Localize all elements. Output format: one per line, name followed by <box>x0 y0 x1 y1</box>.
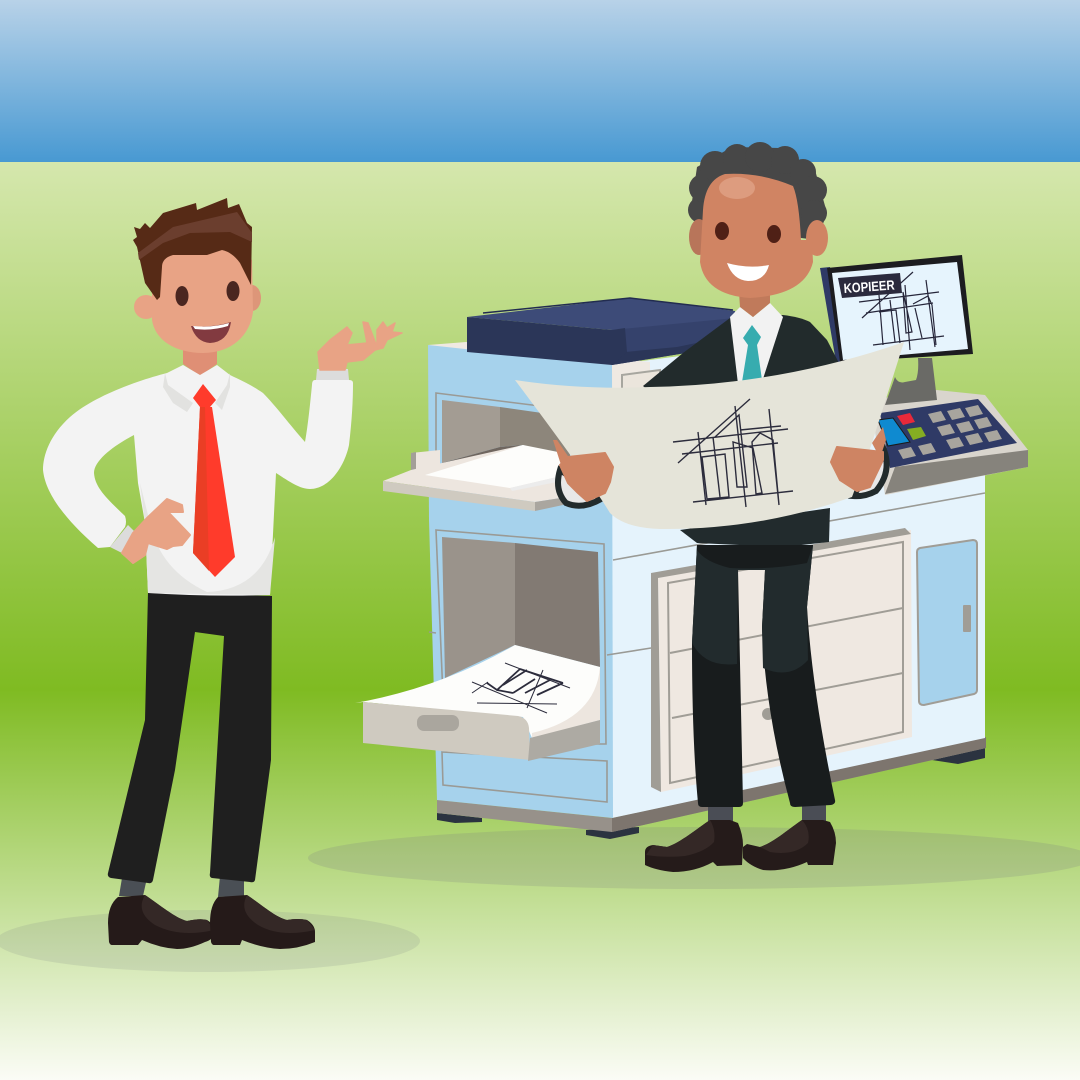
left hand <box>560 453 613 501</box>
socks <box>119 876 244 897</box>
trouser upper shading <box>692 545 813 672</box>
monitor sketch <box>859 272 944 350</box>
blueprint sheet <box>515 342 904 529</box>
eyes <box>176 286 188 306</box>
panel lines <box>429 493 985 655</box>
shoes <box>108 895 315 949</box>
right man <box>515 142 904 872</box>
ears <box>134 295 158 319</box>
control panel <box>870 390 1028 495</box>
trousers <box>108 592 272 883</box>
smile <box>727 263 769 281</box>
paper slot <box>622 370 660 395</box>
copier front blue body <box>428 345 613 818</box>
monitor <box>820 255 973 405</box>
forehead highlight <box>719 177 755 199</box>
jacket <box>643 315 840 392</box>
cuffs <box>558 450 887 506</box>
copier right body <box>612 340 985 818</box>
mouth <box>191 322 231 343</box>
right hand <box>831 447 883 491</box>
blueprint sketch on paper <box>472 663 570 713</box>
neck <box>739 292 770 317</box>
wrists <box>553 427 886 468</box>
collar <box>163 373 230 412</box>
head <box>700 174 813 298</box>
shoes <box>645 820 836 872</box>
jacket bottom <box>680 508 830 547</box>
socks <box>708 806 733 823</box>
tie <box>193 384 235 577</box>
ears <box>689 219 709 255</box>
left cuff <box>110 525 136 553</box>
hand on hip <box>122 499 190 563</box>
monitor label: KOPIEER <box>843 277 895 296</box>
raised hand <box>318 322 402 370</box>
main drawer opening <box>436 530 606 744</box>
shirt <box>730 303 783 384</box>
eyes <box>715 222 729 240</box>
side door <box>917 540 977 705</box>
neck <box>183 345 217 376</box>
raised cuff <box>316 369 349 380</box>
hair <box>688 142 827 240</box>
copier base <box>437 737 986 832</box>
pull-out drawer front <box>363 702 600 761</box>
trousers <box>692 545 835 807</box>
upper output tray <box>383 445 567 511</box>
left man <box>43 198 402 949</box>
right cabinet doors <box>651 528 912 792</box>
upper output opening <box>436 393 612 500</box>
bottom panel <box>442 752 607 802</box>
scanner lid <box>467 298 735 365</box>
top beige strip <box>428 342 650 390</box>
shadow: copier and right man <box>308 827 1080 889</box>
blueprint sketch <box>673 399 793 507</box>
hair <box>133 198 252 300</box>
tie <box>742 325 762 382</box>
hair highlight <box>138 212 252 260</box>
copier machine <box>355 255 1028 839</box>
head <box>152 240 253 353</box>
paper on drawer <box>355 645 600 738</box>
shirt with arms <box>43 365 353 596</box>
shadow: left man <box>0 910 420 972</box>
copier feet <box>437 748 985 839</box>
shirt belly shade <box>140 483 275 595</box>
sky band <box>0 0 1080 162</box>
monitor label <box>838 273 902 298</box>
